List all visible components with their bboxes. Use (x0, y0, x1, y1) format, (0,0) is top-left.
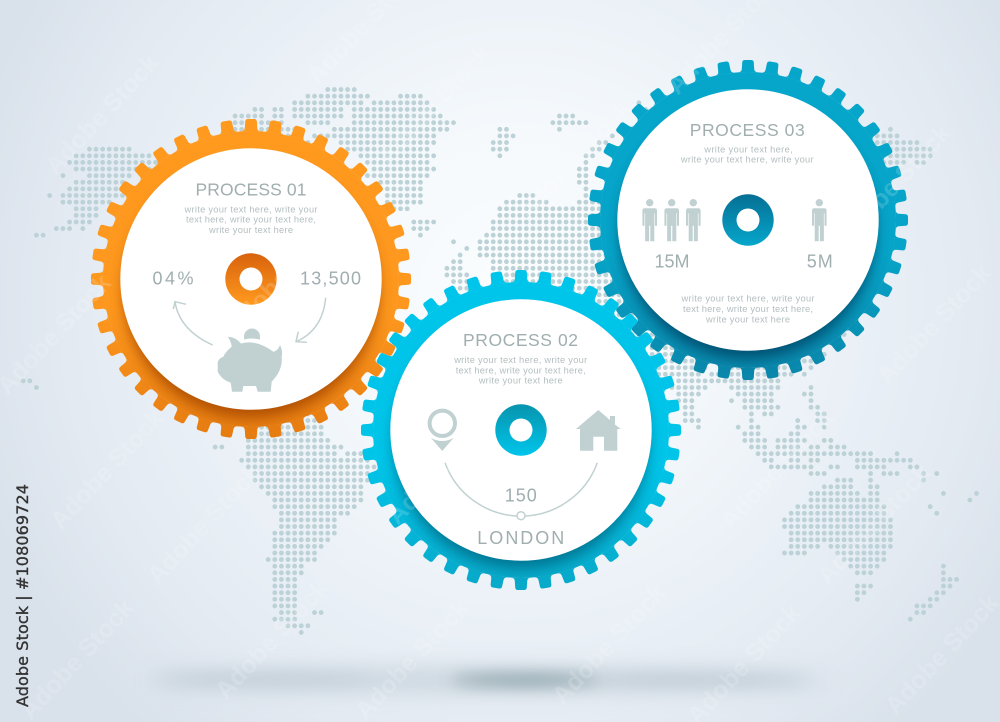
map: south america (215, 414, 374, 632)
stat: 04%: 04% (152, 269, 194, 289)
gear 3 ring and teeth (588, 60, 908, 380)
heading: process 01: PROCESS 01 (196, 179, 306, 199)
icon: three people (642, 199, 701, 241)
body text: process 03 bottom (680, 294, 814, 324)
icon: location pin (430, 411, 455, 451)
map: east russia (877, 129, 930, 162)
gear 3 white disc (617, 89, 879, 351)
gear: process 01 (91, 119, 411, 439)
stat: 15M: 15M (654, 251, 690, 271)
body text: process 01 (184, 204, 318, 235)
heading: process 03: PROCESS 03 (690, 120, 805, 140)
gear: process 02 (361, 270, 681, 590)
stock watermarks: Adobe Stock (222, 209, 347, 340)
stock watermarks: Adobe Stock (142, 459, 267, 590)
body text: process 02: write your text here, write your (453, 355, 587, 365)
process 01 text (152, 179, 361, 289)
smile arc with node (445, 463, 597, 520)
icon: house (576, 410, 621, 451)
body text: process 03 top (680, 144, 814, 165)
map: greenland and scandinavia (493, 116, 586, 156)
body text: process 01: write your text here, write your (184, 204, 318, 214)
body text: process 03 bottom: text here, write your text here, (683, 304, 813, 314)
body text: process 03 top: write your text here, (703, 144, 793, 154)
icon: piggy bank (218, 328, 282, 392)
heading: process 02: PROCESS 02 (463, 330, 578, 350)
stock watermarks: Adobe Stock (210, 574, 335, 705)
dotted world map (23, 90, 977, 632)
gear 3 centre ring (722, 194, 774, 246)
map: europe, africa and asia (447, 103, 844, 374)
stock watermarks: Adobe Stock (547, 579, 672, 710)
body text: process 01: text here, write your text here, (186, 215, 316, 225)
arrow: right curved (296, 298, 326, 342)
stock watermarks: Adobe Stock (872, 259, 997, 390)
body text: process 03 bottom: write your text here, write your (680, 294, 814, 304)
body text: process 02: text here, write your text here, (456, 365, 586, 375)
stock watermarks: Adobe Stock (512, 94, 637, 225)
gear 1 white disc (120, 148, 382, 410)
stat: 5M: 5M (807, 251, 833, 271)
stock id side label: Adobe Stock | #108069724 (13, 484, 32, 707)
gear: process 03 (588, 60, 908, 380)
stock watermarks: Adobe Stock (40, 49, 165, 180)
gear 2 ring and teeth (361, 270, 681, 590)
body text: process 01: write your text here (208, 225, 293, 235)
stock watermarks: Adobe Stock (350, 594, 475, 722)
stat: 13,500: 13,500 (300, 269, 361, 289)
body text: process 02: write your text here (478, 376, 563, 386)
stat: 150: 150 (505, 486, 537, 506)
stock watermarks: Adobe Stock (382, 399, 507, 530)
arrow: left curved (173, 302, 213, 345)
stock watermarks: Adobe Stock (15, 594, 140, 722)
stock watermarks: Adobe Stock (45, 404, 170, 535)
process 02 text (453, 330, 587, 548)
process 03 text (654, 120, 833, 324)
map: north america (23, 90, 454, 387)
gear 2 centre ring (495, 404, 547, 456)
gear 1 ring and teeth (91, 119, 411, 439)
stock watermarks: Adobe Stock (372, 39, 497, 170)
body text: process 02 (453, 355, 587, 386)
floor shadow (150, 671, 830, 689)
label: london: LONDON (477, 528, 564, 548)
stock watermarks: Adobe Stock (715, 404, 840, 535)
icon: one person (812, 199, 827, 241)
gear 1 centre ring (225, 253, 277, 305)
gear 2 white disc (390, 299, 652, 561)
stock watermarks: Adobe Stock (812, 459, 937, 590)
body text: process 03 top: write your text here, write your (680, 155, 814, 165)
body text: process 03 bottom: write your text here (705, 314, 790, 324)
stock watermarks: Adobe Stock (832, 119, 957, 250)
map: south-east asia and oceania (672, 381, 977, 619)
